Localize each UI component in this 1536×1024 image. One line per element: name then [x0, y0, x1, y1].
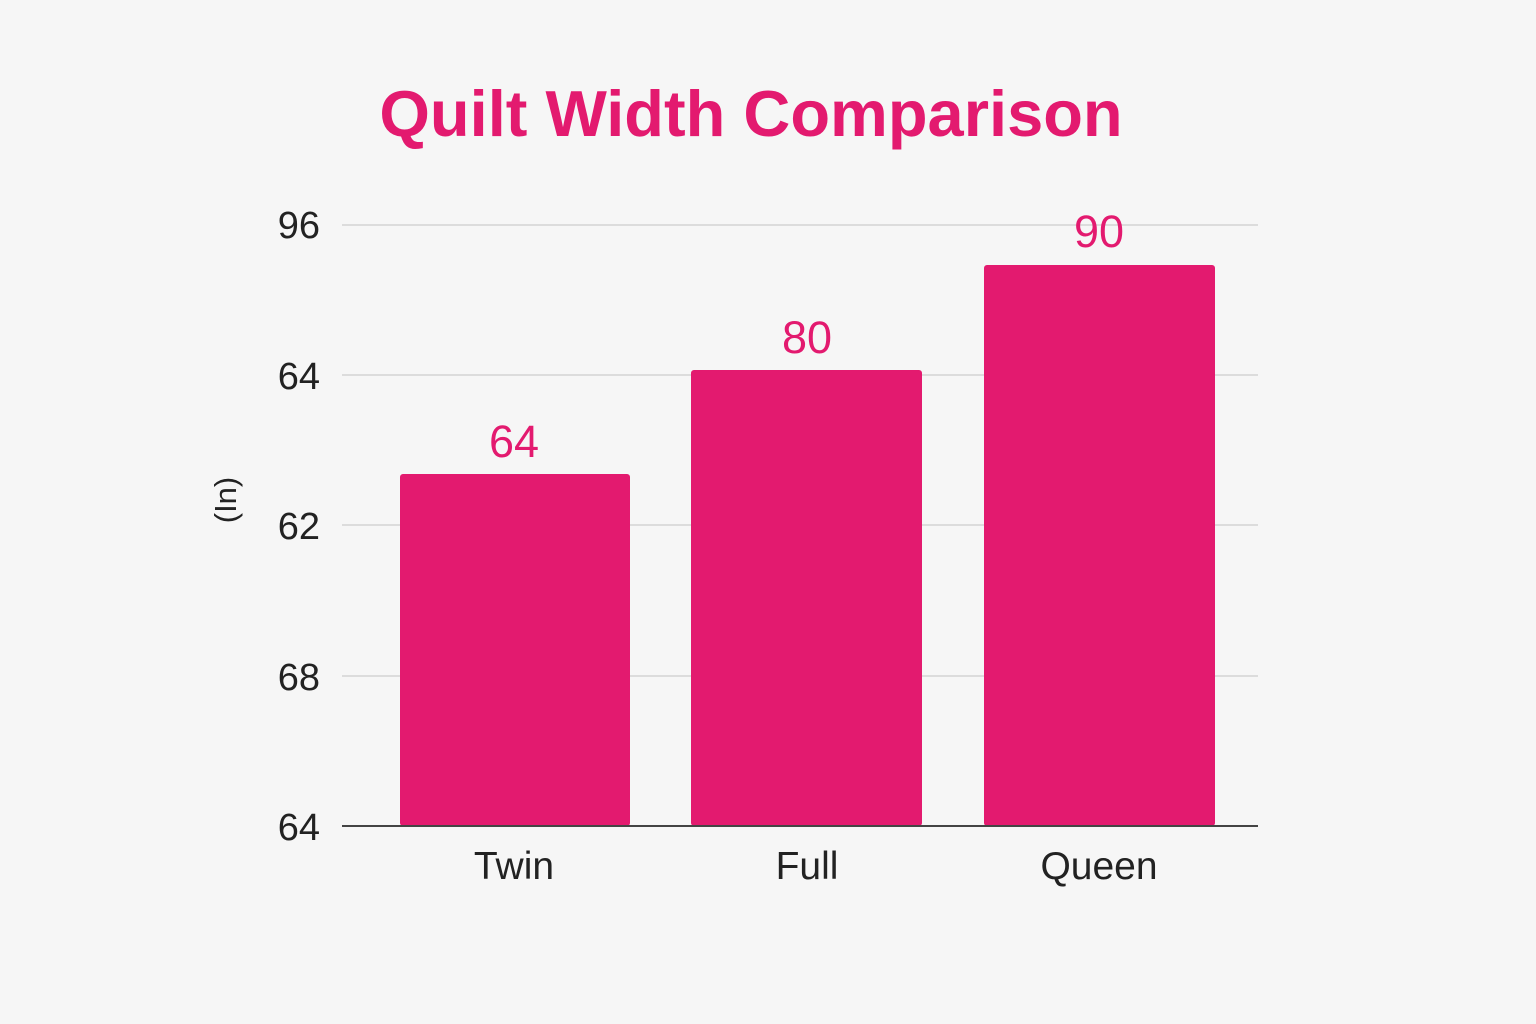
value labels: 64 [489, 416, 539, 467]
y-axis labels: 62 [278, 506, 320, 548]
value labels: 90 [1074, 206, 1124, 257]
y-axis labels: 64 [278, 807, 320, 849]
y-axis labels: 96 [278, 205, 320, 247]
value labels [489, 206, 1124, 467]
x-axis labels: Full [776, 845, 838, 888]
title: Quilt Width Comparison [379, 77, 1123, 150]
bars [400, 265, 1215, 826]
x-axis labels [474, 845, 1158, 888]
x-axis labels: Queen [1040, 845, 1158, 888]
y-axis labels: 68 [278, 657, 320, 699]
y-axis labels [278, 205, 320, 849]
x-axis labels: Twin [474, 845, 554, 888]
y-axis title: (In) [208, 477, 243, 523]
value labels: 80 [782, 312, 832, 363]
y-axis labels: 64 [278, 356, 320, 398]
